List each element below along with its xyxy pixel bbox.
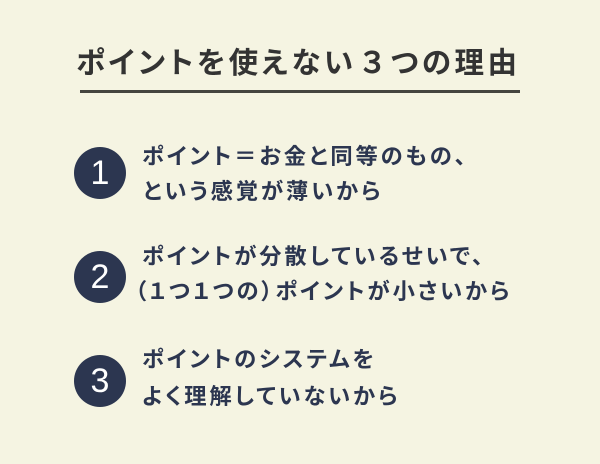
reason 2 line 2: （１つ１つの）ポイントが小さいから [135,274,512,306]
number badge 1 [74,147,126,199]
reason 1 [74,139,469,206]
number badge 3: 3 [91,362,109,400]
number badge 1: 1 [91,154,109,192]
reason 3 line 1: ポイントのシステムを [142,342,377,374]
reason 1 line 2: という感覚が薄いから [143,174,383,206]
number badge 2 [74,251,126,303]
title underline [80,90,520,93]
reason 2 [74,239,512,306]
title: ポイントを使えない３つの理由 [76,40,520,82]
reason 1 line 1: ポイント＝お金と同等のもの、 [142,139,469,171]
number badge 3 [74,355,126,407]
number badge 2: 2 [91,258,109,296]
reason 3 line 2: よく理解していないから [142,379,400,411]
reason 2 line 1: ポイントが分散しているせいで、 [142,239,486,271]
